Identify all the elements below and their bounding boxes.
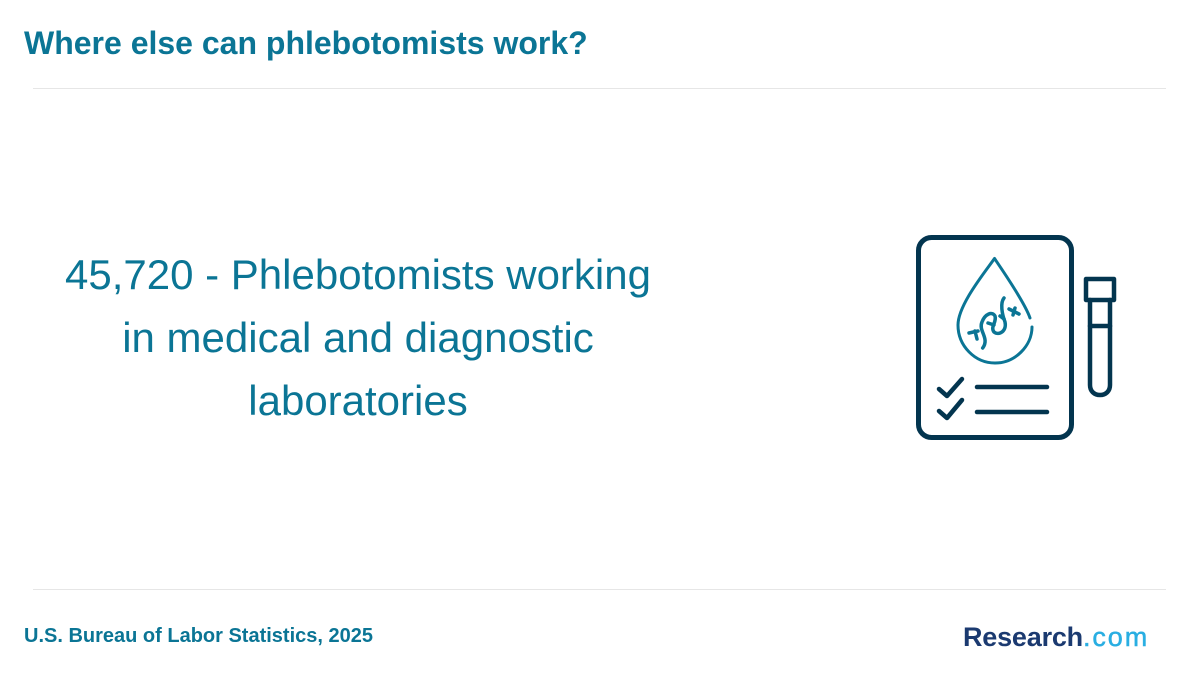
logo: Research.com: Research.com — [963, 622, 1149, 652]
icon: test tube — [1086, 279, 1114, 395]
statistic text: 45,720 - Phlebotomists working — [65, 251, 651, 298]
statistic text: in medical and diagnostic — [122, 314, 594, 361]
icon: lab report with blood drop and test tube — [916, 235, 1116, 440]
statistic text — [65, 251, 651, 424]
icon: checklist ticks — [939, 379, 962, 418]
icon: blood drop with DNA — [958, 258, 1032, 363]
statistic text: laboratories — [248, 377, 468, 424]
title: Where else can phlebotomists work? — [24, 25, 588, 61]
icon: checklist lines — [977, 387, 1047, 412]
icon: report page — [918, 238, 1072, 438]
source note: U.S. Bureau of Labor Statistics, 2025 — [24, 625, 373, 647]
